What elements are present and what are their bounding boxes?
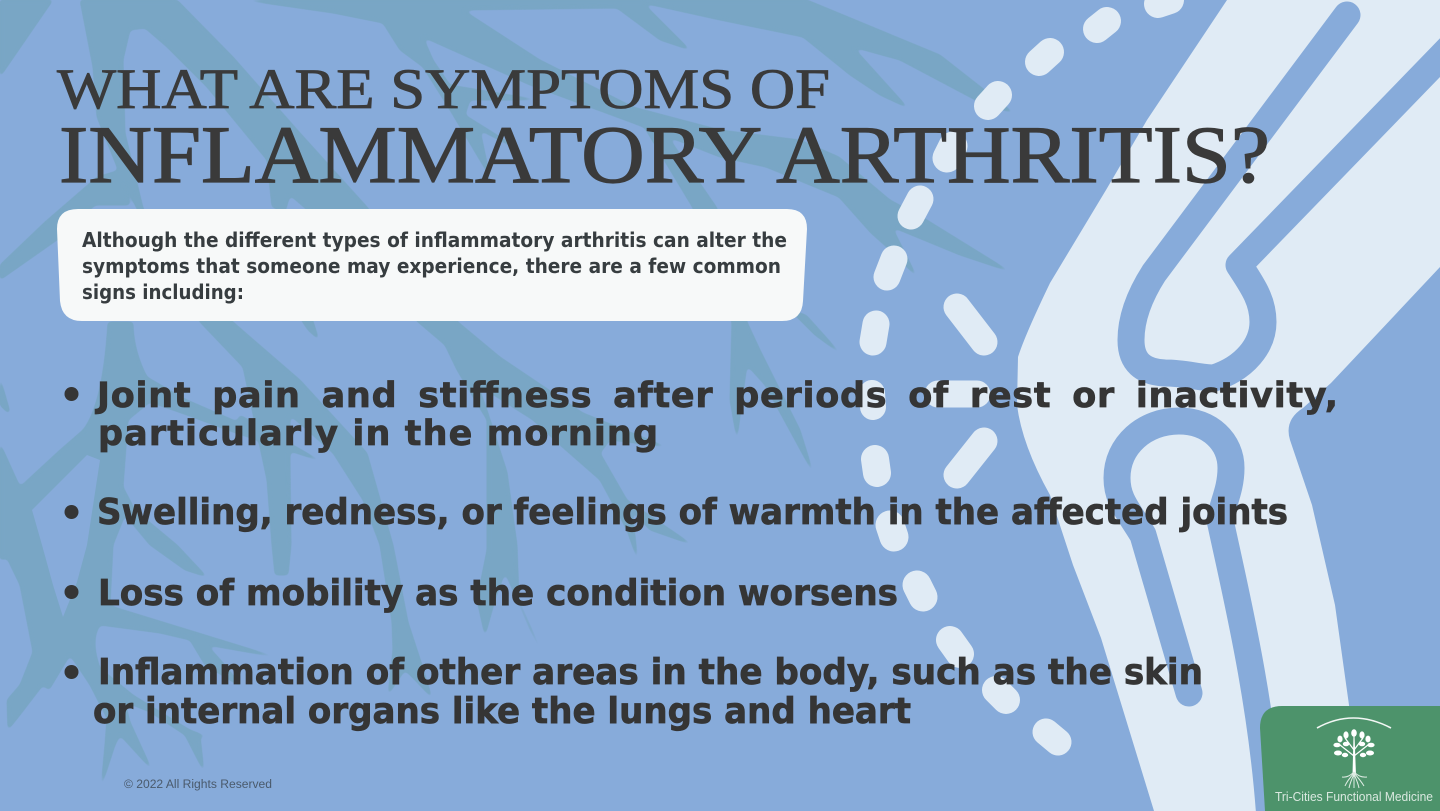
intro callout: Although the different types of inflammatory arthritis can alter the	[82, 228, 787, 252]
logo name: Tri-Cities Functional Medicine	[1275, 790, 1433, 804]
symptom 4	[64, 652, 1203, 732]
symptom 2: Swelling, redness, or feelings of warmth in the affected joints	[97, 492, 1288, 533]
symptom 4: or internal organs like the lungs and heart	[93, 691, 911, 732]
logo arc	[1317, 718, 1391, 728]
symptom 1: particularly in the morning	[98, 414, 658, 454]
root pattern gap	[32, 455, 100, 617]
upper bone inner line	[1131, 15, 1440, 378]
intro callout	[57, 209, 807, 321]
symptom 4: Inflammation of other areas in the body, such as the skin	[98, 652, 1203, 693]
logo tree	[1333, 729, 1375, 775]
intro callout: signs including:	[82, 280, 244, 304]
logo roots	[1342, 772, 1367, 788]
symptom 1: Joint pain and stiffness after periods of rest or inactivity,	[95, 376, 1338, 416]
dashed motion arc	[872, 0, 1170, 742]
title: INFLAMMATORY ARTHRITIS?	[59, 110, 1270, 200]
copyright: © 2022 All Rights Reserved	[124, 779, 272, 791]
title	[57, 58, 1270, 200]
logo badge	[1260, 706, 1440, 811]
intro callout: symptoms that someone may experience, there are a few common	[82, 254, 781, 278]
lower bone inner line	[1117, 421, 1270, 811]
knee joint illustration	[1017, 0, 1440, 811]
symptom 1	[64, 376, 1338, 454]
bone outline	[1017, 0, 1440, 811]
background root pattern	[0, 0, 1014, 788]
title: WHAT ARE SYMPTOMS OF	[57, 58, 830, 120]
symptom 3: Loss of mobility as the condition worsens	[98, 573, 898, 614]
